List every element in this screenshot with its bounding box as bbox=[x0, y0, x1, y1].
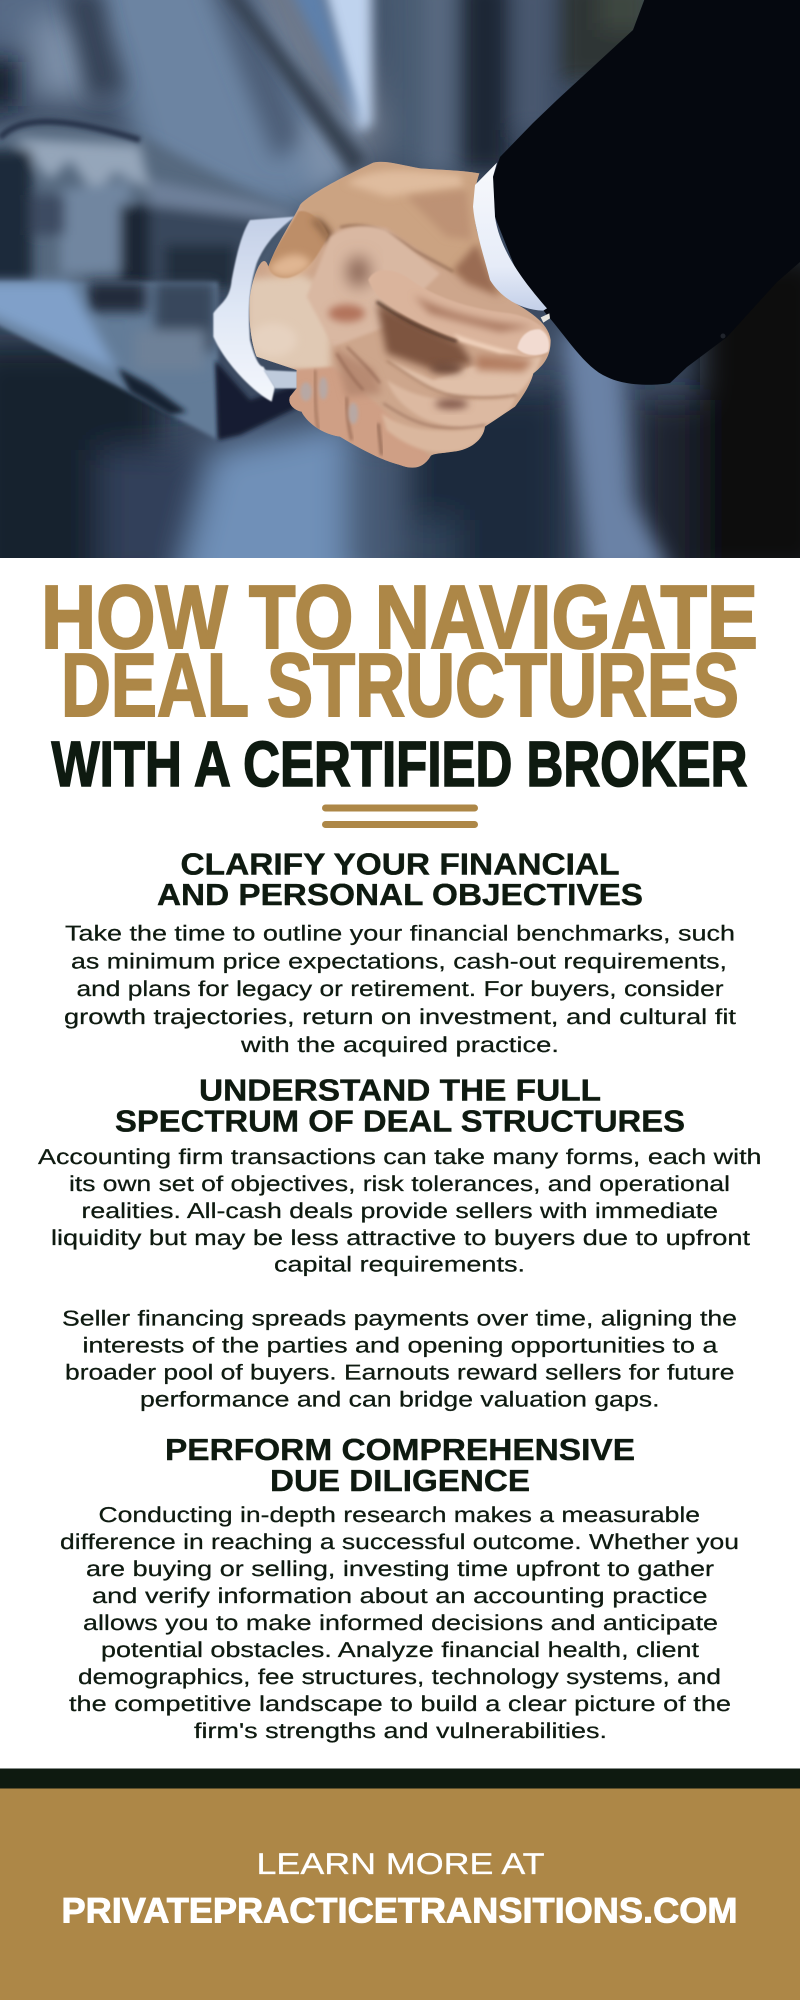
third finger bbox=[387, 380, 515, 427]
fourth finger bbox=[382, 413, 485, 452]
body text: paragraph 2: interests of the parties and opening opportunities to a bbox=[82, 1334, 718, 1358]
collar and pocket lines bbox=[0, 122, 140, 140]
body text: paragraph 2: broader pool of buyers. Earnouts reward sellers for future bbox=[65, 1361, 734, 1385]
suit background bbox=[0, 0, 800, 605]
heading: UNDERSTAND THE FULL bbox=[199, 1074, 601, 1108]
body text: the competitive landscape to build a clear picture of the bbox=[69, 1692, 731, 1716]
body text: paragraph 1 bbox=[38, 1145, 762, 1277]
left sleeve lower bbox=[0, 282, 218, 440]
index finger bbox=[368, 270, 551, 357]
left jacket cuff bbox=[215, 360, 296, 440]
body text: firm's strengths and vulnerabilities. bbox=[194, 1719, 607, 1743]
left white cuff bbox=[213, 217, 295, 402]
body text: paragraph 1: liquidity but may be less attractive to buyers due to upfront bbox=[51, 1226, 750, 1250]
body text: growth trajectories, return on investment, and cultural fit bbox=[64, 1005, 736, 1029]
fingernail bbox=[517, 329, 549, 355]
back of hand bbox=[300, 162, 480, 266]
section: due diligence bbox=[60, 1433, 739, 1743]
body text: and verify information about an accounting practice bbox=[92, 1584, 708, 1608]
knuckle area bbox=[307, 226, 440, 347]
heading: CLARIFY YOUR FINANCIAL bbox=[180, 848, 620, 882]
wrist and palm bbox=[247, 273, 333, 373]
heading bbox=[157, 848, 643, 912]
body text: paragraph 2: Seller financing spreads payments over time, aligning the bbox=[62, 1307, 737, 1331]
body text: paragraph 2: performance and can bridge valuation gaps. bbox=[140, 1388, 660, 1412]
section: clarify objectives bbox=[64, 848, 736, 1057]
heading: PERFORM COMPREHENSIVE bbox=[165, 1433, 635, 1467]
website url: PRIVATEPRACTICETRANSITIONS.COM bbox=[62, 1890, 738, 1930]
sleeve button bbox=[720, 334, 726, 338]
right black sleeve bbox=[493, 0, 800, 385]
body text: paragraph 1: realities. All-cash deals provide sellers with immediate bbox=[82, 1199, 718, 1223]
heading: SPECTRUM OF DEAL STRUCTURES bbox=[115, 1104, 685, 1138]
body text: with the acquired practice. bbox=[240, 1033, 559, 1057]
body text: Take the time to outline your financial benchmarks, such bbox=[65, 922, 735, 946]
body text: paragraph 1: Accounting firm transactions can take many forms, each with bbox=[38, 1145, 762, 1169]
hand base bbox=[249, 162, 551, 468]
heading: DUE DILIGENCE bbox=[270, 1464, 530, 1498]
heading: AND PERSONAL OBJECTIVES bbox=[157, 878, 643, 912]
body text: difference in reaching a successful outcome. Whether you bbox=[60, 1530, 739, 1554]
handshake hands bbox=[213, 162, 551, 473]
section: deal structures bbox=[38, 1074, 762, 1412]
lower background bbox=[0, 262, 800, 558]
body text: paragraph 1: capital requirements. bbox=[274, 1253, 525, 1277]
body text: are buying or selling, investing time upfront to gather bbox=[86, 1557, 714, 1581]
middle finger bbox=[387, 357, 542, 397]
call to action label: LEARN MORE AT bbox=[256, 1848, 544, 1881]
body text: demographics, fee structures, technology systems, and bbox=[78, 1665, 721, 1689]
shirt and lapel bbox=[322, 0, 372, 132]
body text: potential obstacles. Analyze financial health, client bbox=[101, 1638, 699, 1662]
left thumb bbox=[268, 211, 328, 278]
footer band bbox=[0, 1768, 800, 2000]
body text: allows you to make informed decisions and anticipate bbox=[83, 1611, 718, 1635]
blue jacket strip bbox=[562, 330, 672, 575]
divider: double rule bbox=[322, 804, 478, 828]
body text: paragraph 1: its own set of objectives, risk tolerances, and operational bbox=[69, 1172, 730, 1196]
heading bbox=[165, 1433, 635, 1498]
body text: Conducting in-depth research makes a measurable bbox=[98, 1503, 700, 1527]
right white cuff bbox=[473, 163, 547, 311]
body text: and plans for legacy or retirement. For buyers, consider bbox=[76, 977, 724, 1001]
heading bbox=[115, 1074, 685, 1138]
body text: as minimum price expectations, cash-out requirements, bbox=[71, 950, 727, 974]
body text: paragraph 2 bbox=[62, 1307, 737, 1412]
photo: handshake bbox=[0, 0, 800, 605]
body text bbox=[60, 1503, 739, 1743]
title bbox=[41, 568, 758, 800]
left sleeve upper bbox=[0, 118, 295, 290]
lower fingers bbox=[289, 366, 430, 468]
body text bbox=[64, 922, 736, 1057]
shaded palm wedge bbox=[377, 303, 473, 370]
